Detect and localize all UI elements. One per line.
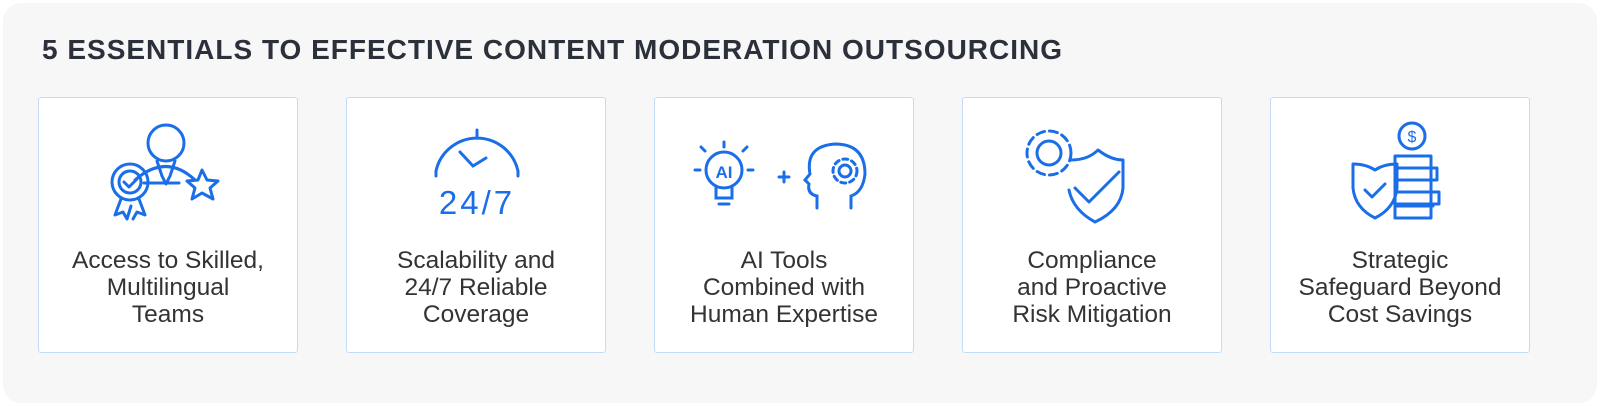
label: Combined with: [703, 274, 865, 301]
icon: AI bulb plus head gear: [694, 140, 866, 210]
label: [397, 247, 555, 328]
label: Strategic: [1352, 247, 1448, 274]
icon: person with badge and star: [110, 124, 220, 221]
icon: clock 24/7: 24/7: [439, 184, 515, 221]
label: Multilingual: [107, 274, 229, 301]
label: Scalability and: [397, 247, 555, 274]
label: [1012, 247, 1172, 328]
icon: gear and shield with check: [1026, 130, 1124, 224]
label: Safeguard Beyond: [1299, 274, 1501, 301]
icon: shield and coin stack: [1352, 122, 1440, 220]
card: skilled teams: [38, 97, 298, 353]
icon: shield and coin stack: $: [1408, 129, 1417, 146]
card: AI tools: [654, 97, 914, 353]
label: Cost Savings: [1328, 301, 1472, 328]
label: Access to Skilled,: [72, 247, 264, 274]
card: scalability: [346, 97, 606, 353]
label: Risk Mitigation: [1012, 301, 1172, 328]
title: 5 ESSENTIALS TO EFFECTIVE CONTENT MODERATION OUTSOURCING: [42, 34, 1063, 65]
label: [1299, 247, 1501, 328]
icon: AI bulb plus head gear: AI: [716, 163, 732, 182]
label: [690, 247, 878, 328]
label: Coverage: [423, 301, 529, 328]
label: Teams: [132, 301, 204, 328]
label: [72, 247, 264, 328]
label: Human Expertise: [690, 301, 878, 328]
card: strategic safeguard: [1270, 97, 1530, 353]
label: Compliance: [1027, 247, 1157, 274]
label: and Proactive: [1017, 274, 1167, 301]
card: compliance: [962, 97, 1222, 353]
label: AI Tools: [741, 247, 827, 274]
label: 24/7 Reliable: [404, 274, 548, 301]
icon: clock 24/7: [434, 128, 520, 221]
